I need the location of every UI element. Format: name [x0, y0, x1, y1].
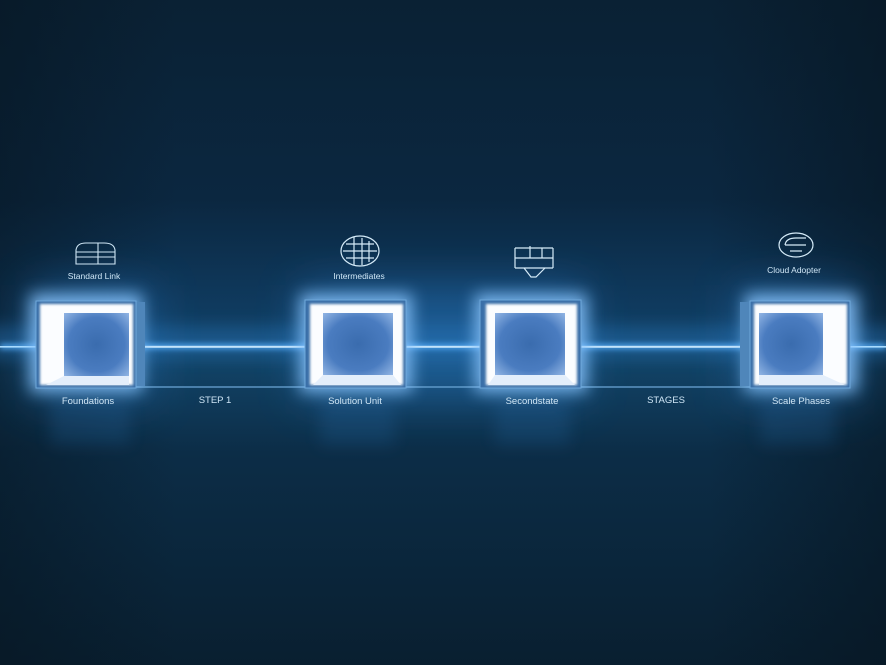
icon: globe	[341, 236, 379, 266]
label: gap one bottom: STEP 1	[199, 395, 231, 406]
icon: book	[76, 243, 115, 264]
icon: badge	[779, 233, 813, 257]
label: step three bottom: Secondstate	[506, 396, 558, 407]
box 4	[740, 294, 857, 392]
label: step four top: Cloud Adopter	[767, 265, 821, 275]
label: step two top: Intermediates	[333, 271, 385, 281]
lower baseline	[36, 386, 850, 388]
box 3	[475, 294, 587, 392]
label: step one bottom: Foundations	[62, 396, 114, 407]
label: step two bottom: Solution Unit	[328, 396, 382, 407]
box 1	[30, 294, 145, 392]
box 2	[300, 294, 412, 392]
label: step one top: Standard Link	[68, 271, 121, 281]
label: gap two bottom: STAGES	[647, 395, 685, 406]
icon: network	[515, 246, 553, 277]
label: step four bottom: Scale Phases	[772, 396, 830, 407]
glowing connector line	[0, 344, 886, 349]
